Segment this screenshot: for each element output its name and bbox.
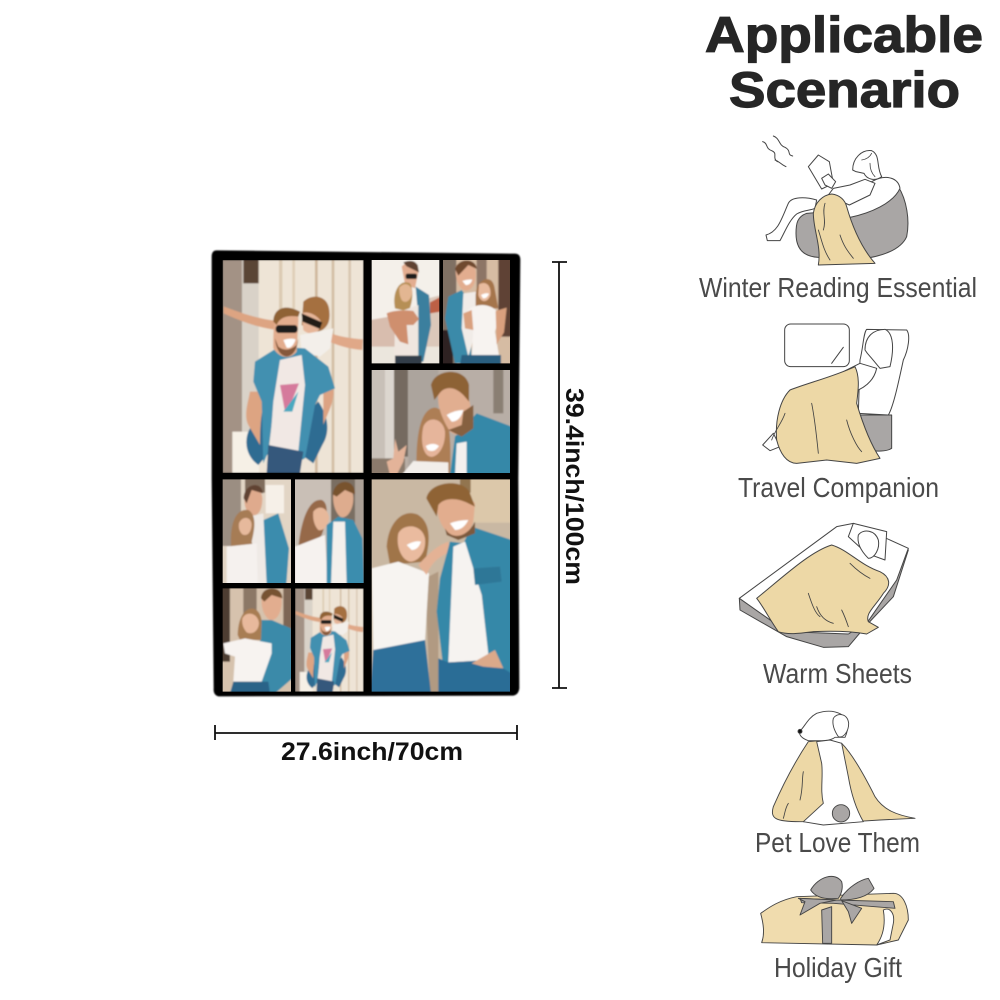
- blanket black background: [212, 250, 520, 696]
- height dimension: [552, 262, 588, 688]
- label: pet love them: Pet Love Them: [755, 827, 920, 858]
- height label: 39.4inch/100cm: [560, 388, 588, 585]
- icon: travel seat: [763, 324, 909, 463]
- icon: reading in beanbag: [763, 136, 908, 265]
- label: travel companion: Travel Companion: [738, 472, 939, 503]
- icon: bed: [739, 523, 908, 647]
- photo: hugging city view: [370, 258, 441, 365]
- photo: couple smiling: [221, 587, 293, 693]
- icon: dog with blanket: [772, 711, 915, 825]
- label: warm sheets: Warm Sheets: [763, 658, 912, 689]
- photo: leaning on wall large: [370, 478, 512, 693]
- icon: gift: [761, 876, 908, 945]
- photo: piggyback small: [295, 588, 364, 692]
- photo: laughing profile: [293, 478, 365, 584]
- photo: piggyback large: [223, 260, 364, 473]
- photo: selfie with peace sign: [370, 368, 512, 475]
- width label: 27.6inch/70cm: [281, 738, 463, 766]
- label: holiday gift: Holiday Gift: [774, 952, 902, 983]
- infographic canvas: [210, 14, 982, 983]
- photo: two standing with pillar: [442, 258, 512, 365]
- title: [705, 7, 983, 118]
- width dimension: [215, 725, 517, 766]
- photo: couple by pillars: [221, 478, 293, 584]
- panel: photo blanket: [212, 250, 520, 696]
- title: Scenario: [729, 62, 960, 118]
- title: Applicable: [705, 7, 983, 63]
